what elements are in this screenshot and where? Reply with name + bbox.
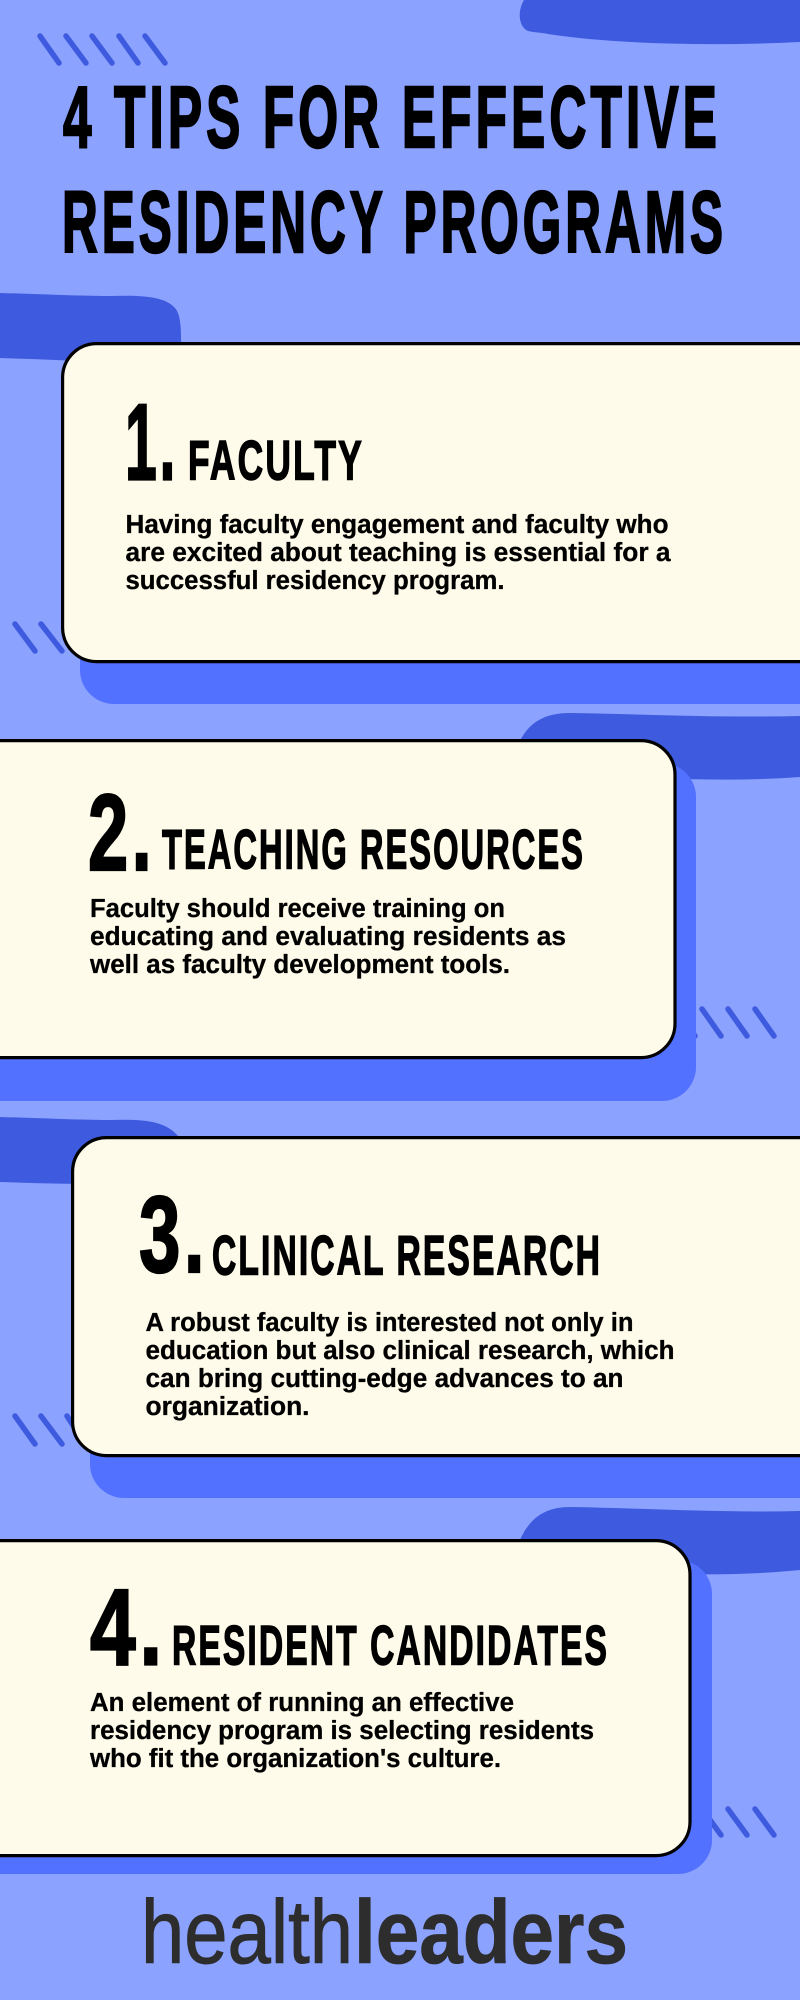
blob: right of card 2 [518, 713, 800, 780]
body text: An element of running an effective [90, 1689, 514, 1717]
body text: who fit the organization's culture. [89, 1745, 501, 1773]
stripes: right of card 2 [676, 1009, 774, 1036]
panel: tip 2 teaching resources [0, 741, 696, 1101]
panel: tip 4 resident candidates [0, 1541, 712, 1874]
card shadow [90, 1178, 800, 1498]
number 2: 2. [88, 772, 155, 894]
body text: educating and evaluating residents as [90, 923, 566, 951]
heading: FACULTY [188, 428, 364, 492]
title [62, 69, 727, 271]
number 4: 4. [90, 1566, 166, 1688]
blob: right of card 4 [518, 1507, 800, 1574]
body text: organization. [146, 1393, 310, 1421]
body text: well as faculty development tools. [89, 951, 510, 979]
number 1: 1. [125, 382, 178, 504]
body text: education but also clinical research, which [146, 1337, 674, 1365]
stripes: left of card 1 [15, 624, 62, 651]
blob: left of card 3 [0, 1117, 178, 1184]
body text: can bring cutting-edge advances to an [146, 1365, 624, 1393]
logo: healthleaders [141, 1883, 628, 1983]
number 3: 3. [139, 1174, 208, 1296]
stripes: top left [40, 36, 165, 63]
card shadow [0, 1560, 712, 1874]
body text [89, 895, 566, 979]
card box [0, 1541, 690, 1856]
body text: A robust faculty is interested not only in [146, 1309, 634, 1337]
card box [63, 344, 800, 662]
blob: top right [520, 0, 800, 44]
card box [73, 1138, 800, 1456]
body text: Faculty should receive training on [90, 895, 505, 923]
body text [89, 1689, 594, 1773]
card shadow [80, 384, 800, 704]
body text: residency program is selecting residents [90, 1717, 594, 1745]
body text [126, 511, 671, 595]
body text: are excited about teaching is essential for a [126, 539, 671, 567]
body text: successful residency program. [126, 567, 504, 595]
stripes: left of card 3 [15, 1416, 85, 1444]
logo: healthleaders: leaders [354, 1883, 628, 1983]
card shadow [0, 763, 696, 1101]
body text [146, 1309, 674, 1421]
body text: Having faculty engagement and faculty who [126, 511, 668, 539]
card box [0, 741, 675, 1058]
panel: tip 3 clinical research [73, 1138, 800, 1498]
stripes: right of card 4 [702, 1809, 774, 1835]
panel: tip 1 faculty [63, 344, 800, 704]
blob: left of card 1 [0, 293, 181, 362]
logo: healthleaders: health [141, 1883, 353, 1983]
